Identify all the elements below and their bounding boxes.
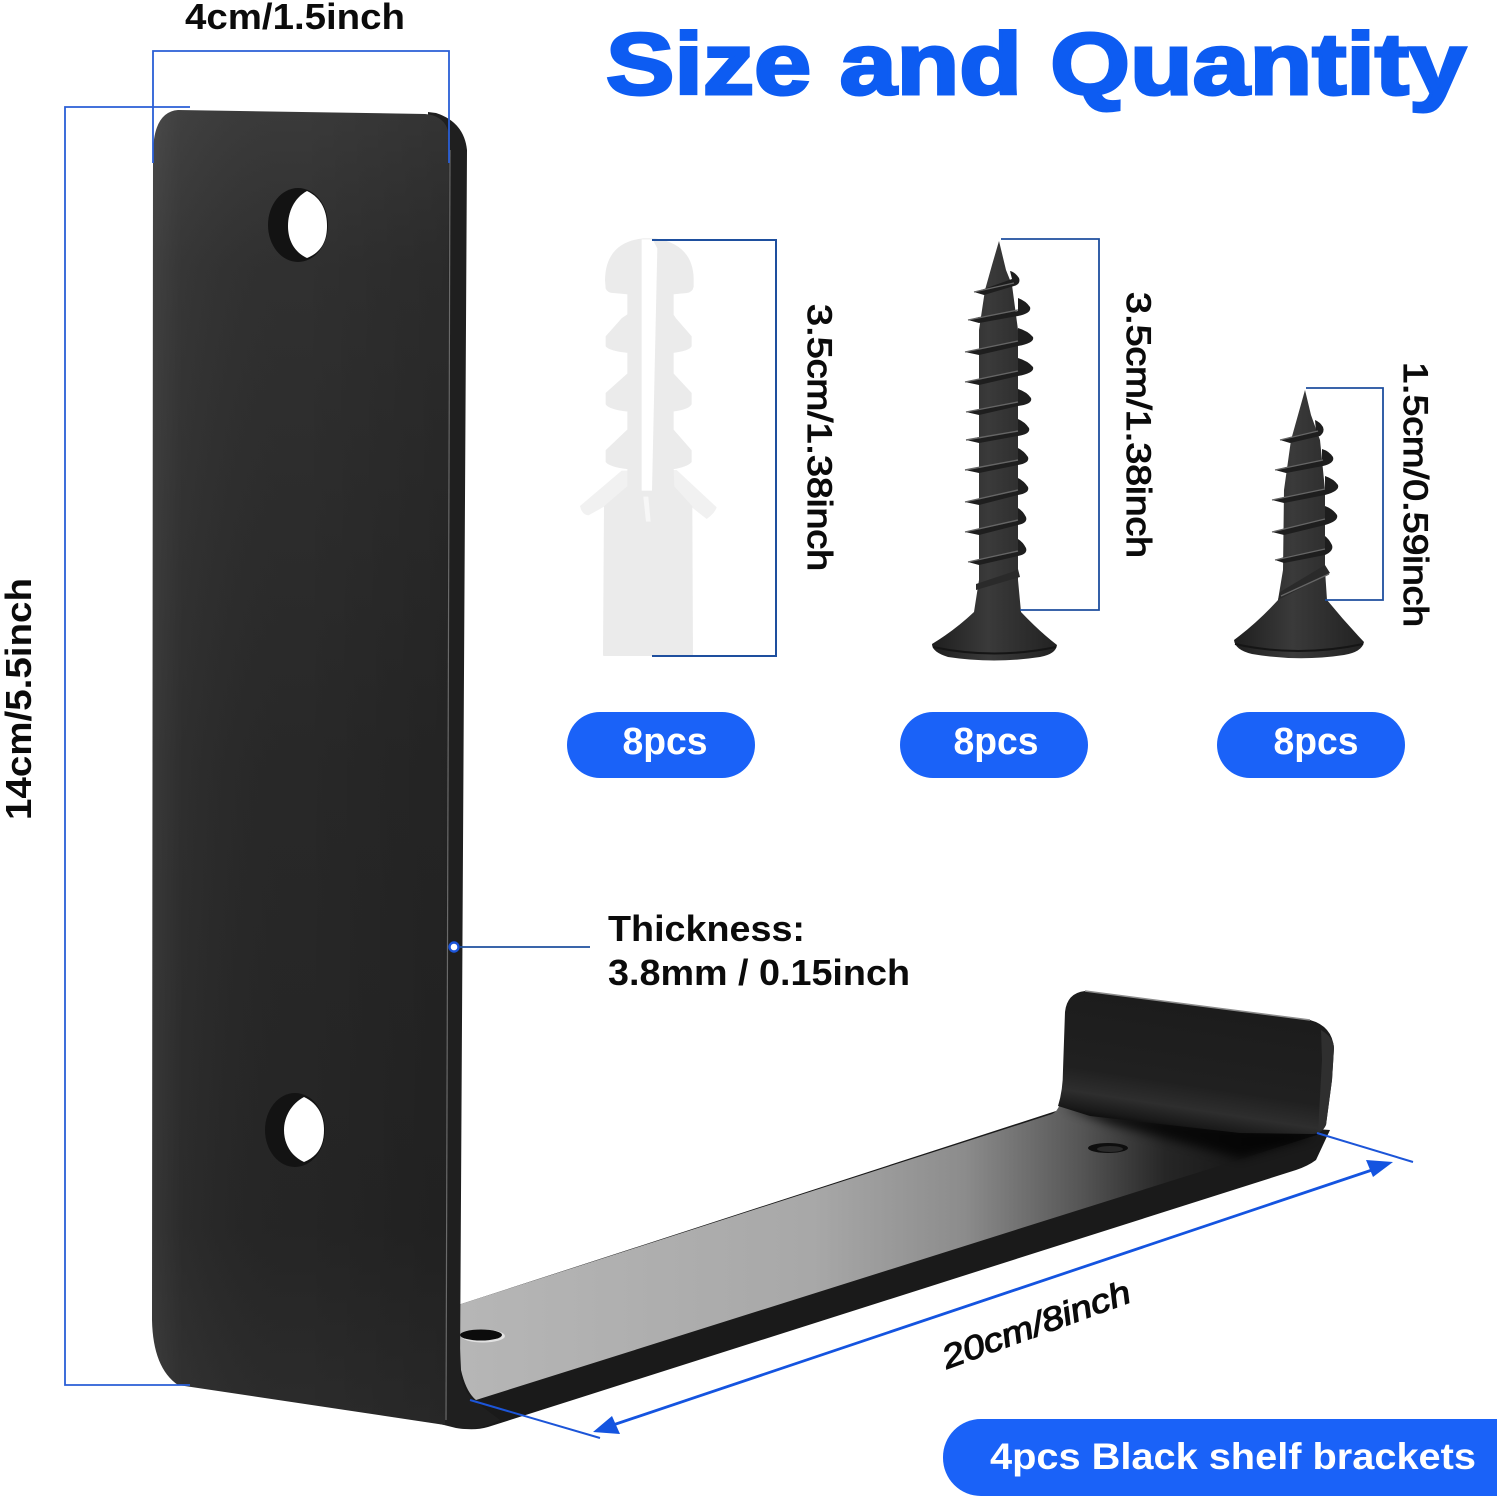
front face bbox=[152, 110, 449, 1425]
quantity pill: long screws bbox=[900, 712, 1088, 778]
thickness callout: 3.8mm / 0.15inch bbox=[608, 952, 910, 993]
dimension: height 14cm/5.5inch bbox=[0, 107, 190, 1385]
quantity pill: short screws bbox=[1217, 712, 1405, 778]
lower mounting hole bbox=[265, 1093, 325, 1167]
short screw bracket bbox=[1306, 388, 1383, 600]
long screw bracket bbox=[1001, 239, 1099, 610]
shelf arm bbox=[458, 1104, 1330, 1429]
title: Size and Quantity bbox=[606, 16, 1466, 113]
long screw shape bbox=[932, 241, 1057, 660]
dimension: width 4cm/1.5inch bbox=[153, 0, 449, 163]
callout text: Thickness: bbox=[608, 908, 805, 949]
long screw bbox=[932, 239, 1157, 660]
length arrow bbox=[593, 1160, 1393, 1434]
face highlight edge bbox=[446, 150, 450, 1420]
dimension: length 20cm/8inch bbox=[470, 1133, 1413, 1438]
far screw hole bbox=[1088, 1143, 1128, 1153]
quantity pill: anchors: 8pcs bbox=[622, 721, 708, 763]
wall anchor bbox=[580, 239, 838, 656]
callout marker bbox=[450, 942, 458, 952]
length label: 20cm/8inch bbox=[936, 1273, 1135, 1376]
quantity pill: short screws: 8pcs bbox=[1274, 721, 1358, 763]
banner: 4pcs black shelf brackets bbox=[943, 1419, 1497, 1496]
callout leader bbox=[460, 946, 590, 948]
quantity pill: long screws: 8pcs bbox=[954, 721, 1038, 763]
upper mounting hole bbox=[268, 188, 328, 262]
upturned lip bbox=[1058, 991, 1334, 1134]
shelf screw hole bbox=[461, 1330, 505, 1342]
banner: 4pcs black shelf brackets: 4pcs Black shelf brackets bbox=[990, 1436, 1476, 1477]
short screw bbox=[1234, 362, 1434, 658]
side edge bbox=[428, 112, 500, 1429]
quantity pill: anchors bbox=[567, 712, 755, 778]
anchor bracket bbox=[652, 240, 776, 656]
short screw size label: 1.5cm/0.59inch bbox=[1396, 362, 1434, 627]
thickness callout bbox=[450, 908, 910, 993]
short screw shape bbox=[1234, 390, 1364, 658]
bracket bbox=[152, 110, 1334, 1429]
anchor size label: 3.5cm/1.38inch bbox=[800, 304, 838, 571]
long screw size label: 3.5cm/1.38inch bbox=[1119, 292, 1157, 558]
anchor body bbox=[580, 239, 717, 655]
